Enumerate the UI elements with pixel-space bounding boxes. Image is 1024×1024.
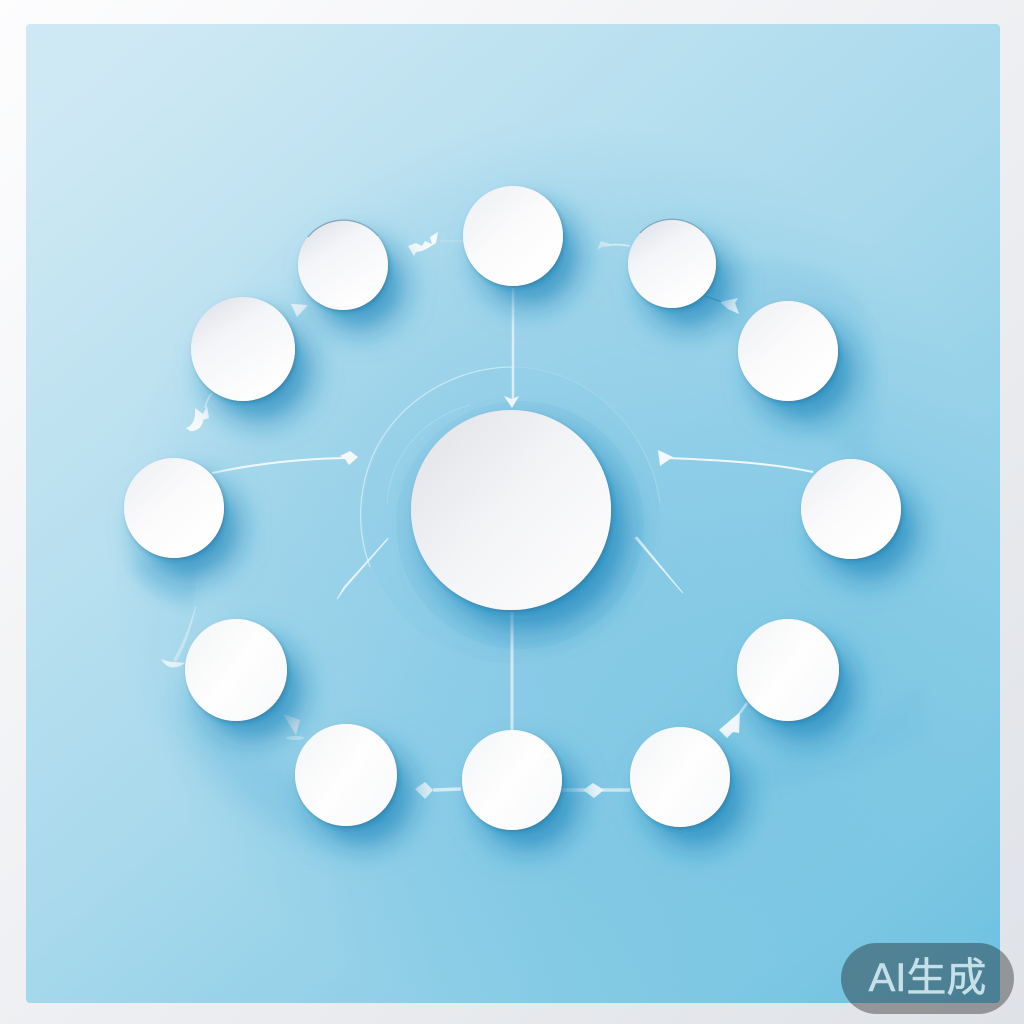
node: upper right small [628,220,716,308]
arrow: bottom to bottom left [415,782,461,799]
arrow: lower left to bottom left [283,714,304,740]
node: bottom [462,730,562,830]
arrow: left upper to left [186,393,212,431]
arrow: upper right node to right upper node [705,296,739,314]
node: lower left [185,619,287,721]
node: center [411,410,611,610]
node: bottom right [630,727,730,827]
center rings [361,367,660,567]
arrow: top node to center [504,288,519,408]
badge: AI generated: AI生成 [869,956,986,1000]
node: bottom left [295,724,397,826]
arrow: left node to center [212,451,358,473]
rim: dark top edges of upper small nodes [308,219,704,237]
node: lower right [737,619,839,721]
arrow: top node to upper left node [408,232,463,256]
node: left [124,458,224,558]
line: diagonal right [635,537,683,593]
node: top [463,186,563,286]
node: right upper [738,301,838,401]
badge: AI generated [841,943,1014,1014]
arrow: upper left small to left upper [291,304,308,317]
arrow: left to lower left [161,570,198,667]
halo: soft shapes behind the ring [130,260,925,850]
connector: center to bottom node [510,612,514,732]
nodes: white circles [124,186,901,830]
node: upper left small [298,220,388,310]
line: diagonal left [337,538,388,599]
arrow: bottom right to bottom [561,783,630,798]
arrow: upper right node to top [597,241,630,250]
arrow: bottom right to lower right [719,703,747,738]
arrow: right node to center [658,450,813,472]
node: left upper [191,297,295,401]
node: right [801,459,901,559]
